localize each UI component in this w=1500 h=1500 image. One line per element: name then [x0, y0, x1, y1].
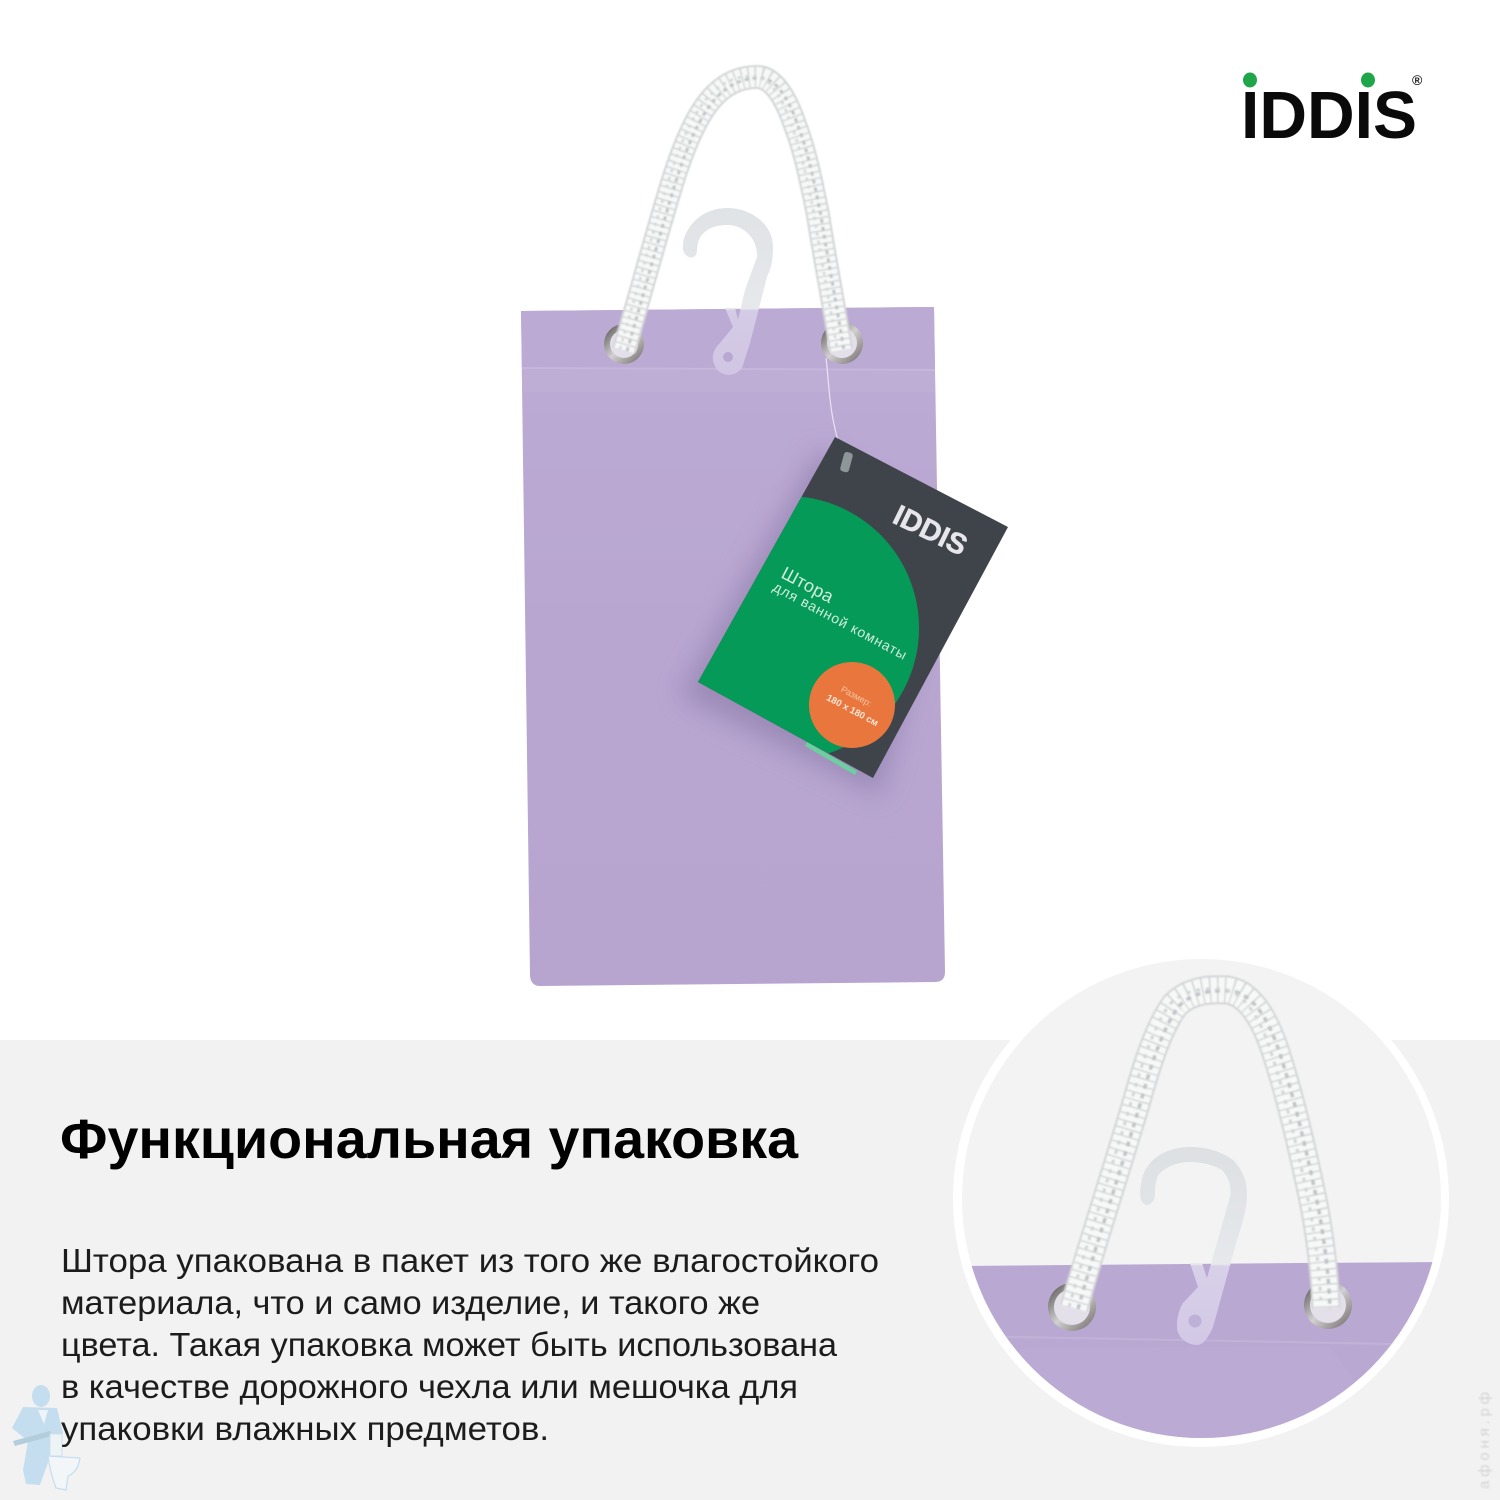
registered mark: ® — [1412, 72, 1423, 88]
site watermark: афоня.рф — [1476, 1392, 1493, 1489]
plumber wrench — [13, 1431, 52, 1446]
bag body — [521, 307, 945, 986]
plumber shirt — [38, 1410, 48, 1424]
toilet bowl — [48, 1456, 80, 1490]
close-up left grommet — [1048, 1283, 1096, 1331]
body text: цвета. Такая упаковка может быть использована — [61, 1326, 838, 1363]
body text: в качестве дорожного чехла или мешочка для — [61, 1368, 798, 1405]
plumber body — [12, 1407, 63, 1485]
tag size label: Размер: — [839, 684, 874, 709]
logo green dots — [1243, 72, 1375, 88]
tag plastic fastener — [840, 451, 853, 473]
right grommet — [821, 322, 863, 364]
tag mint edge — [805, 742, 857, 775]
close-up right grommet — [1304, 1281, 1352, 1329]
logo wordmark: IDDIS — [1241, 78, 1417, 153]
product: lilac bag with rope handles — [521, 76, 945, 986]
brand logo — [1241, 72, 1423, 153]
toilet tank — [50, 1434, 62, 1456]
hang tag — [698, 437, 1008, 778]
body text: упаковки влажных предметов. — [61, 1410, 549, 1447]
rope handle — [620, 76, 844, 351]
left grommet — [604, 324, 644, 364]
plumber head — [32, 1385, 50, 1407]
tag subtitle: для ванной комнаты — [771, 579, 910, 663]
heading: Функциональная упаковка — [60, 1107, 799, 1170]
tag title: Штора — [778, 563, 838, 607]
plastic hook — [683, 208, 773, 375]
tag logo: IDDIS — [888, 500, 972, 562]
close-up hook — [1140, 1147, 1247, 1345]
circle white ring — [953, 951, 1449, 1447]
close-up rope — [1069, 989, 1330, 1309]
tag string — [826, 358, 848, 470]
detail circle: close-up of handle — [953, 951, 1449, 1450]
body text — [61, 1242, 879, 1447]
body text: Штора упакована в пакет из того же влагостойкого — [61, 1242, 879, 1279]
plumber watermark — [12, 1385, 80, 1490]
body text: материала, что и само изделие, и такого же — [61, 1284, 760, 1321]
close-up bag — [972, 1262, 1432, 1438]
bag top hem — [521, 307, 935, 369]
tag orange circle — [809, 662, 895, 748]
tag green arc — [698, 496, 919, 754]
tag base — [698, 437, 1008, 778]
circle inner background — [962, 959, 1441, 1438]
tag size value: 180 x 180 см — [824, 693, 880, 729]
hang tag shadow — [680, 450, 950, 795]
bottom grey panel — [0, 1040, 1500, 1500]
